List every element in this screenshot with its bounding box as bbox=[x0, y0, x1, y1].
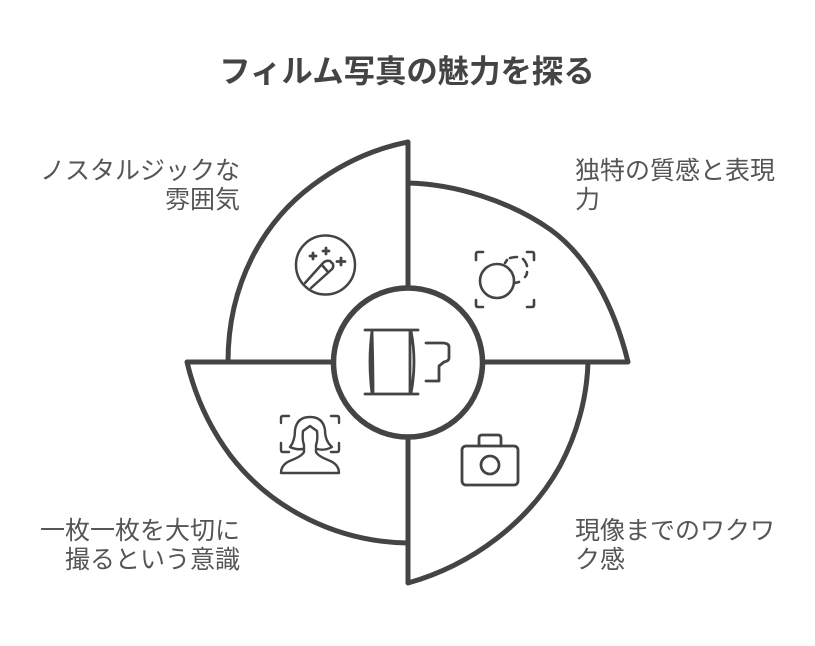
icon: overlapping circles in focus frame bbox=[476, 252, 534, 307]
label: awareness of each frame: 撮るという意識 bbox=[65, 546, 240, 574]
icon: film bbox=[365, 330, 449, 394]
panel: bottom-left quadrant bbox=[187, 362, 408, 543]
label: nostalgic atmosphere: ノスタルジックな bbox=[40, 157, 240, 185]
label: excitement until developing: ク感 bbox=[575, 546, 625, 574]
title: フィルム写真の魅力を探る bbox=[219, 54, 595, 89]
label: nostalgic atmosphere bbox=[40, 157, 240, 214]
label: unique texture and expression: 独特の質感と表現 bbox=[575, 157, 775, 185]
label: unique texture and expression: 力 bbox=[575, 186, 600, 214]
label: excitement until developing bbox=[575, 517, 775, 574]
label: awareness of each frame bbox=[40, 517, 240, 574]
icon: magic wand bbox=[296, 236, 355, 294]
label: excitement until developing: 現像までのワクワ bbox=[575, 517, 775, 545]
icon: camera bbox=[462, 435, 518, 485]
panel: bottom-right quadrant bbox=[408, 362, 588, 583]
panel: top-left quadrant bbox=[228, 142, 408, 362]
center circle bbox=[334, 288, 482, 437]
label: nostalgic atmosphere: 雰囲気 bbox=[165, 186, 240, 214]
icon: portrait in focus frame bbox=[281, 416, 339, 473]
panel: top-right quadrant bbox=[408, 183, 628, 362]
label: awareness of each frame: 一枚一枚を大切に bbox=[40, 517, 240, 545]
label: unique texture and expression bbox=[575, 157, 775, 214]
